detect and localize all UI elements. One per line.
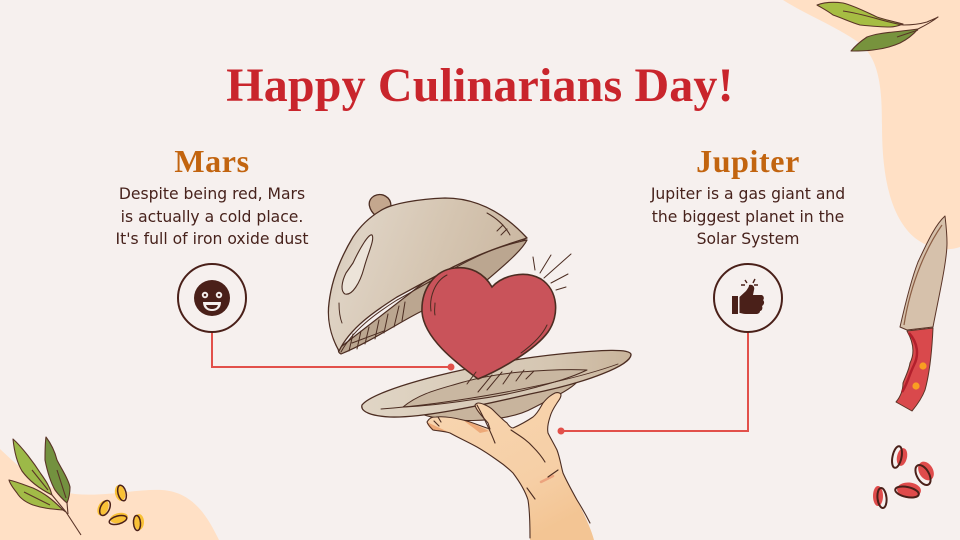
lid knob	[369, 195, 391, 216]
icon: smiling face	[178, 264, 246, 332]
leaves: bottom left	[9, 437, 81, 535]
text: Mars description: is actually a cold place.	[121, 208, 303, 226]
lid dome	[328, 198, 527, 351]
icon: thumbs up	[714, 264, 782, 332]
plate foot	[417, 382, 577, 421]
lid interior	[338, 240, 527, 354]
plate well	[403, 370, 587, 407]
text: Mars description	[116, 185, 308, 248]
heart	[422, 254, 571, 379]
connector: Jupiter	[558, 332, 748, 434]
yellow grains	[95, 484, 144, 531]
plate under heart hatching	[467, 370, 534, 392]
text: Jupiter description: Solar System	[697, 230, 799, 248]
hand	[427, 393, 594, 540]
text: Mars description: It's full of iron oxide dust	[116, 230, 308, 248]
heading: Jupiter: Jupiter	[696, 143, 800, 179]
text: Jupiter description: Jupiter is a gas giant and	[651, 185, 845, 203]
lid highlight	[342, 235, 373, 294]
leaves: top right	[817, 2, 938, 51]
plate rim	[362, 350, 631, 417]
cloche lid	[328, 195, 527, 354]
red beans	[873, 445, 937, 508]
heart shine lines	[533, 254, 571, 290]
text: Mars description: Despite being red, Mars	[119, 185, 305, 203]
heading: Mars: Mars	[174, 143, 250, 179]
connector: Mars	[212, 332, 454, 370]
text: Jupiter description	[650, 185, 845, 248]
plate	[362, 350, 631, 421]
title: Happy Culinarians Day!	[226, 59, 734, 112]
knife	[896, 216, 947, 411]
text: Jupiter description: the biggest planet in the	[652, 208, 844, 226]
